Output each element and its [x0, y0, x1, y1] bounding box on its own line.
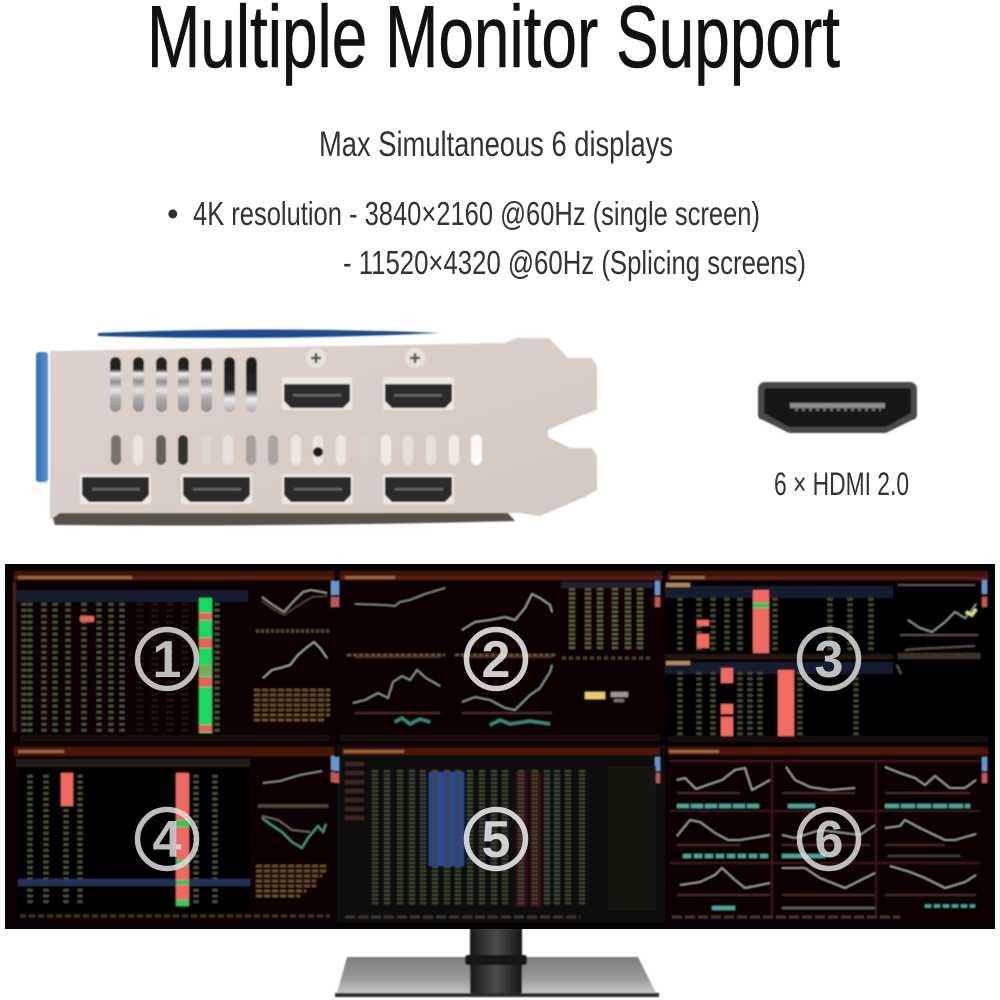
number badge 5 — [466, 810, 526, 869]
number badge 1 — [138, 630, 196, 689]
data table — [561, 582, 653, 588]
highlighted blue column — [429, 772, 464, 866]
nine line charts — [677, 767, 976, 888]
number badge 3: 3 — [815, 631, 843, 689]
panel: screen 1 — [8, 570, 335, 744]
resolution specifications: - 11520×4320 @60Hz (Splicing screens) — [343, 244, 806, 281]
lower vent slots — [111, 435, 482, 465]
number badge 6: 6 — [815, 811, 843, 869]
subtitle: max displays: Max Simultaneous 6 displays — [319, 125, 673, 164]
cooler top edge — [98, 330, 440, 338]
underside shadow — [50, 510, 515, 526]
upper HDMI port 2 — [383, 377, 454, 410]
lower HDMI port 1 — [80, 474, 151, 504]
blue cooler side — [36, 352, 48, 482]
monitor stand — [335, 928, 659, 997]
upper HDMI port 1 — [282, 377, 352, 410]
number badge 2: 2 — [482, 631, 510, 689]
stand base — [337, 957, 656, 993]
upper vent slots — [110, 357, 257, 412]
four line charts — [347, 588, 555, 725]
resolution specifications: 4K resolution - 3840×2160 @60Hz (single screen) — [193, 195, 760, 232]
side chart — [897, 585, 980, 674]
number badge 2 — [466, 630, 526, 689]
lower HDMI port 2 — [181, 474, 252, 504]
volume bars — [677, 806, 975, 908]
panel: screen 6 — [665, 745, 992, 923]
mounting screws — [306, 348, 425, 368]
table rows — [24, 603, 217, 733]
metal plate — [50, 338, 597, 520]
side list — [345, 764, 364, 818]
red and green status cells — [61, 773, 189, 906]
panel: screen 2 — [334, 570, 665, 744]
number badge 1: 1 — [153, 631, 181, 689]
number badge 3 — [800, 630, 858, 689]
resolution specifications: • — [167, 195, 179, 232]
highlighted row — [18, 879, 250, 886]
grid dividers — [670, 761, 980, 915]
table rows — [30, 775, 215, 905]
icon: HDMI connector — [758, 382, 917, 433]
number badge 4 — [138, 810, 196, 869]
side charts — [258, 771, 328, 848]
HDMI label: 6 × HDMI 2.0 — [774, 466, 909, 502]
monitor — [5, 564, 995, 929]
number badge 5: 5 — [482, 811, 510, 869]
panel: screen 3 — [665, 570, 992, 744]
red and green status cells — [697, 590, 794, 736]
panel: screen 4 — [8, 745, 335, 923]
lower HDMI port 3 — [282, 474, 353, 504]
side charts — [256, 590, 330, 678]
monitor bezel — [5, 564, 995, 929]
yellow highlight tag — [585, 692, 605, 699]
lower HDMI port 4 — [383, 474, 454, 504]
panel: screen 5 — [334, 745, 665, 923]
stand neck — [470, 928, 522, 993]
table rows — [375, 770, 582, 905]
green and red status column — [199, 598, 212, 733]
number badge 4: 4 — [153, 811, 182, 869]
resolution specifications — [167, 195, 806, 281]
table rows — [680, 598, 871, 652]
graphics card bracket — [36, 330, 597, 526]
dark red columns — [516, 772, 527, 907]
number badge 6 — [800, 810, 858, 869]
